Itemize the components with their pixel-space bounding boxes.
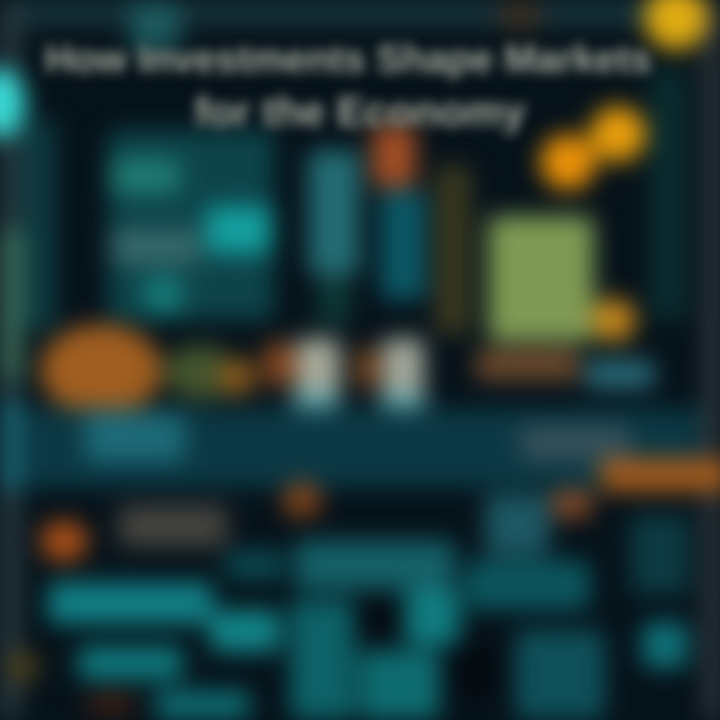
icon: small orange	[218, 358, 256, 396]
text block: lower label	[118, 505, 228, 547]
icon: orange edge right	[600, 458, 720, 492]
panel: teal left panel	[108, 130, 274, 320]
icon: orange strip right	[475, 350, 580, 380]
icon: teal accent	[206, 206, 272, 254]
icon: orange marker	[40, 520, 88, 562]
icon: teal strip right	[585, 360, 655, 388]
icon: yellow coin top right	[644, 0, 708, 50]
icon: orange dot right	[592, 298, 636, 342]
title line 2: for the Economy	[194, 88, 526, 135]
panel: brown narrow column	[435, 165, 471, 335]
panel: bottom teal shapes	[48, 582, 213, 624]
icon: cyan circle left	[0, 68, 26, 138]
icon: bottom left orange specks	[5, 650, 39, 684]
title line 1: How Investments Shape Markets	[45, 38, 651, 81]
text block: band right label	[520, 425, 630, 461]
panel: centre lower column	[318, 275, 350, 325]
icon: orange by figure	[262, 340, 296, 388]
panel: centre-left column	[308, 150, 360, 275]
text block: panel heading	[110, 158, 180, 194]
icon: teal square	[144, 276, 182, 314]
text block: band label	[85, 412, 185, 462]
panel: green card	[488, 216, 594, 342]
icon: centre orange marker	[282, 482, 322, 518]
icon: orange column top	[372, 125, 416, 187]
icon: olive blob	[165, 345, 235, 400]
text block: panel label	[110, 230, 200, 264]
icon: small orange centre	[354, 345, 380, 391]
background bands	[0, 0, 720, 26]
icon: left pale figure	[296, 338, 340, 394]
icon: dark bottom spot	[355, 597, 393, 635]
panel: centre-right column	[380, 190, 426, 300]
title	[38, 37, 657, 142]
panel: horizontal teal band	[20, 408, 700, 488]
icon: orange coin left	[540, 134, 596, 190]
icon: orange coin right	[590, 106, 646, 162]
icon: right pale figure	[382, 338, 424, 394]
icon: large orange blob	[40, 324, 162, 416]
